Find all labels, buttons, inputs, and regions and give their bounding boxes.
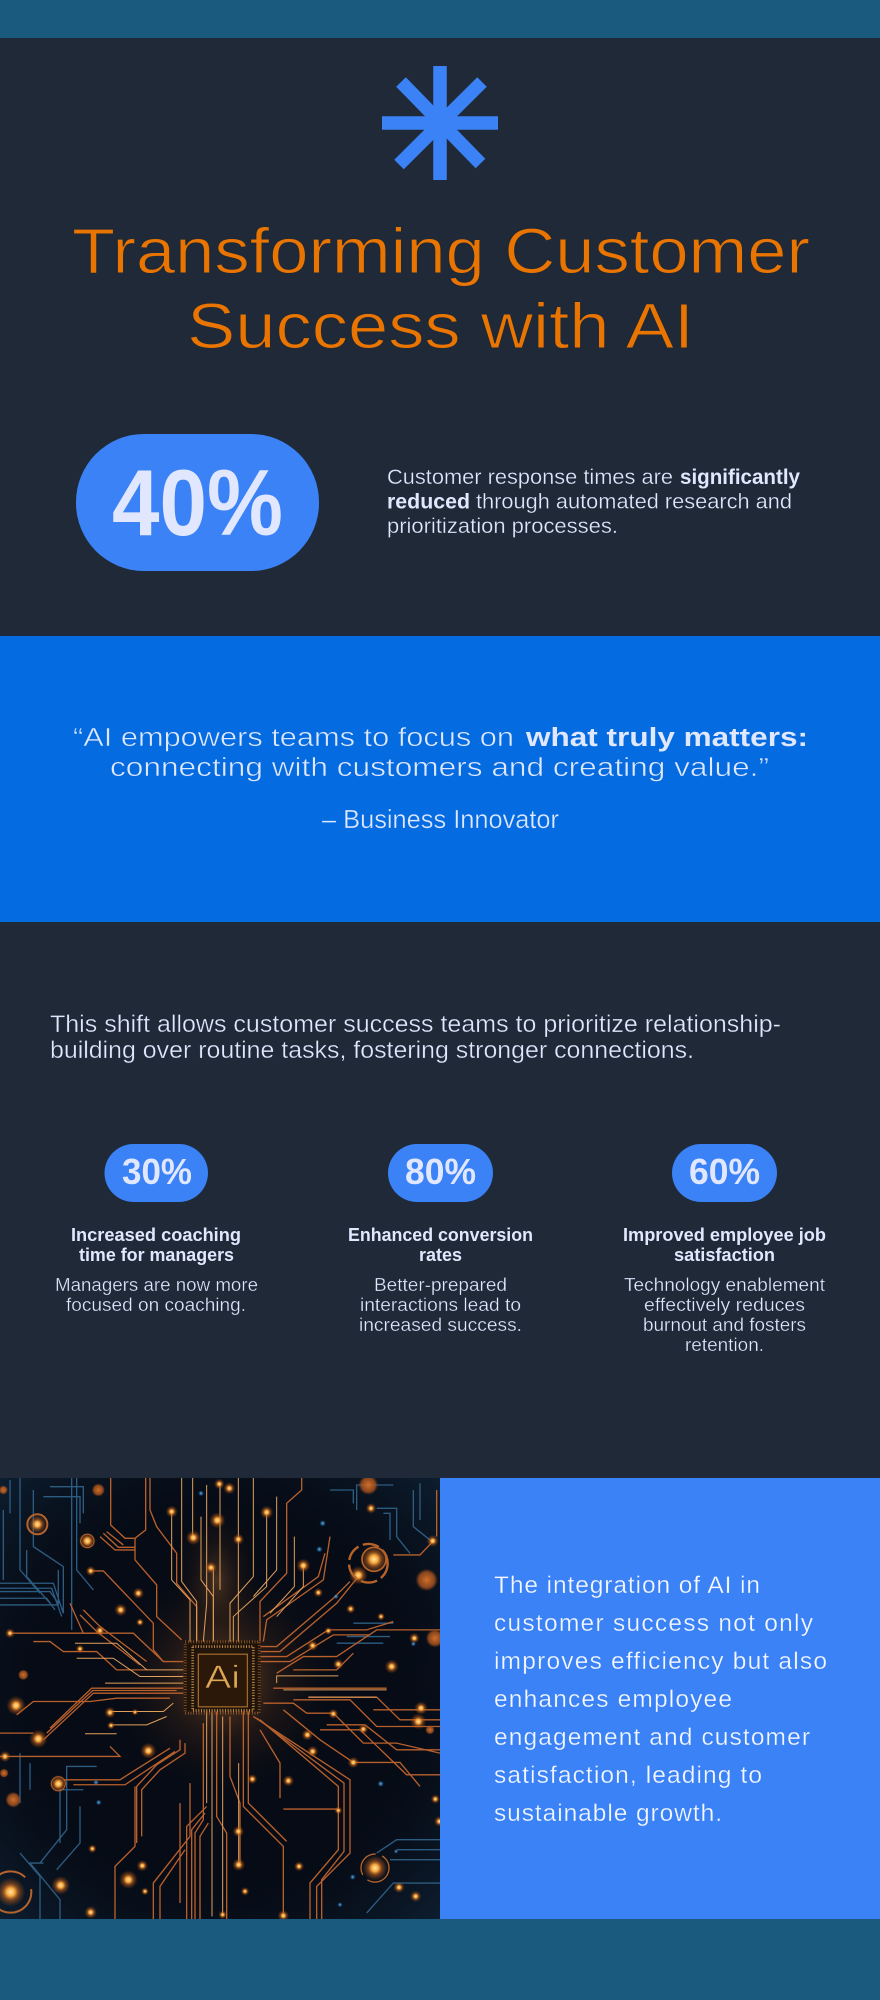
stat heading: Increased coaching: [71, 1225, 241, 1245]
closing paragraph: [494, 1572, 827, 1827]
closing paragraph: enhances employee: [494, 1686, 732, 1713]
panel: coaching stat: [55, 1144, 258, 1315]
stat: 40 percent: [76, 434, 319, 571]
bottom band: [0, 1919, 880, 2000]
chip label: Ai: [205, 1658, 240, 1695]
stat heading: [71, 1225, 241, 1265]
image: AI circuit board: [0, 1478, 440, 1919]
closing paragraph: engagement and customer: [494, 1724, 810, 1751]
stat heading: Enhanced conversion: [348, 1225, 533, 1245]
panel: job satisfaction stat: [623, 1144, 826, 1355]
stat description: interactions lead to: [360, 1294, 521, 1315]
panel: closing statement: [440, 1478, 880, 1919]
stat heading: [348, 1225, 533, 1265]
stat description: focused on coaching.: [66, 1294, 246, 1315]
stat heading: satisfaction: [674, 1245, 775, 1265]
copper traces: [0, 1478, 440, 1919]
stat description: prioritization processes.: [387, 514, 618, 538]
closing paragraph: customer success not only: [494, 1610, 814, 1637]
stat description: Technology enablement: [624, 1274, 825, 1295]
title: [72, 215, 810, 362]
stat description: through automated research and: [476, 490, 792, 514]
processor chip: [184, 1642, 261, 1713]
intro paragraph: building over routine tasks, fostering stronger connections.: [50, 1037, 694, 1064]
panel: conversion stat: [348, 1144, 533, 1335]
title: Transforming Customer: [72, 215, 810, 287]
quote text: connecting with customers and creating value.”: [110, 754, 769, 782]
blue traces: [0, 1478, 440, 1919]
stat heading: [623, 1225, 826, 1265]
stat description: effectively reduces: [644, 1294, 805, 1315]
stat heading: rates: [419, 1245, 462, 1265]
panel: quote band: [0, 636, 880, 922]
glowing rings: [0, 1514, 389, 1913]
blue dots: [93, 1490, 416, 1907]
circuit nodes: [0, 1479, 445, 1921]
intro paragraph: This shift allows customer success teams to prioritize relationship-: [50, 1011, 781, 1038]
quote attribution: – Business Innovator: [322, 804, 559, 834]
stat heading: Improved employee job: [623, 1225, 826, 1245]
stat description: [387, 465, 800, 538]
stat heading: time for managers: [79, 1245, 234, 1265]
stat number 30 percent: 30%: [122, 1151, 192, 1192]
closing paragraph: sustainable growth.: [494, 1800, 722, 1827]
quote text: [73, 724, 808, 782]
stat pill 30 percent: [104, 1144, 208, 1202]
top band: [0, 0, 880, 38]
title: Success with AI: [187, 290, 694, 362]
closing paragraph: improves efficiency but also: [494, 1648, 827, 1675]
orange blobs: [0, 1475, 444, 1808]
closing paragraph: satisfaction, leading to: [494, 1762, 762, 1789]
stat description: [624, 1274, 825, 1355]
stat description: significantly: [680, 465, 800, 489]
intro paragraph: [50, 1011, 781, 1064]
stat pill: [76, 434, 319, 571]
stat number: 40%: [112, 450, 283, 555]
stat pill 60 percent: [672, 1144, 777, 1202]
quote text: “AI empowers teams to focus on: [73, 724, 514, 752]
stat description: [359, 1274, 522, 1335]
stat description: Customer response times are: [387, 465, 673, 489]
stat pill 80 percent: [388, 1144, 493, 1202]
bright traces: [75, 1478, 387, 1916]
icon: asterisk: [382, 66, 498, 180]
closing paragraph: The integration of AI in: [494, 1572, 760, 1599]
quote text: what truly matters:: [525, 724, 808, 752]
stat description: Managers are now more: [55, 1274, 258, 1295]
stat description: reduced: [387, 490, 470, 514]
stat number 80 percent: 80%: [405, 1151, 476, 1192]
stat description: increased success.: [359, 1314, 522, 1335]
stat description: Better-prepared: [374, 1274, 507, 1295]
stat description: retention.: [685, 1334, 764, 1355]
stat description: burnout and fosters: [643, 1314, 806, 1335]
stat description: [55, 1274, 258, 1315]
stat number 60 percent: 60%: [689, 1151, 760, 1192]
